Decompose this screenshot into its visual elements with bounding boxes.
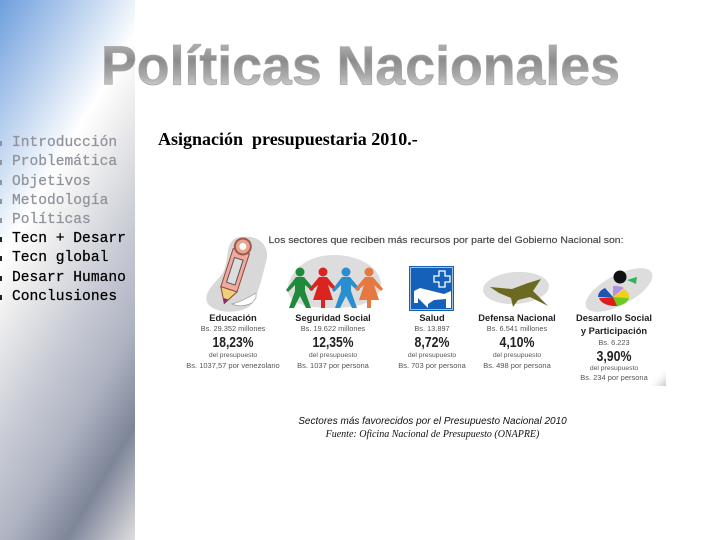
sector: Seguridad Social: Bs. 19.622 millones — [301, 324, 366, 333]
navigation menu: Políticas — [12, 212, 91, 228]
icon: four people holding hands — [286, 255, 383, 308]
icon: fighter jet — [482, 270, 550, 307]
sector: Defensa Nacional — [478, 270, 556, 370]
sector: Educación: Bs. 1037,57 por venezolano — [186, 361, 280, 370]
icon: pie chart and figure — [579, 259, 659, 321]
sector: Seguridad Social — [286, 255, 383, 370]
sector: Defensa Nacional: 4,10% — [500, 335, 535, 351]
sector: Educación: Bs. 29.352 millones — [201, 324, 266, 333]
sector: Salud — [398, 266, 467, 370]
sector: Defensa Nacional: Bs. 498 por persona — [483, 361, 552, 370]
navigation menu: Objetivos — [12, 174, 91, 190]
caption — [298, 416, 567, 440]
sector: Defensa Nacional: Defensa Nacional — [478, 313, 556, 323]
sector: Seguridad Social: Seguridad Social — [295, 313, 371, 323]
navigation menu: Tecn + Desarr — [12, 231, 126, 247]
fade at corner — [648, 368, 666, 386]
sector: Desarrollo Social y Participación: Bs. 234 por persona — [580, 373, 649, 382]
navigation menu: Introducción — [12, 135, 117, 151]
icon: pencil and hand — [206, 236, 267, 312]
sector: Salud: 8,72% — [414, 335, 450, 351]
icon: hospital bed sign — [409, 266, 454, 311]
sector: Seguridad Social: Bs. 1037 por persona — [297, 361, 370, 370]
sector: Seguridad Social: del presupuesto — [309, 352, 357, 359]
sector: Educación: del presupuesto — [209, 352, 257, 359]
sector: Desarrollo Social y Participación: Bs. 6.223 — [598, 338, 630, 347]
sector: Educación — [186, 236, 280, 370]
sector: Desarrollo Social y Participación: Desarrollo Social — [576, 313, 652, 323]
sector: Desarrollo Social y Participación: del presupuesto — [590, 365, 638, 372]
panel: sidebar gradient — [0, 0, 135, 540]
sector: Salud: Salud — [419, 313, 445, 323]
sector: Desarrollo Social y Participación: 3,90% — [596, 349, 632, 365]
caption: Fuente: Oficina Nacional de Presupuesto (ONAPRE) — [326, 429, 539, 440]
navigation menu: Conclusiones — [12, 289, 117, 305]
navigation menu: Tecn global — [12, 250, 108, 266]
navigation menu: Metodología — [12, 193, 108, 209]
sector: Desarrollo Social y Participación — [576, 259, 666, 386]
navigation menu — [0, 134, 126, 305]
heading: budget allocation: Asignación presupuestaria 2010.- — [158, 129, 418, 149]
sector: Educación: Educación — [209, 312, 257, 323]
sector: Defensa Nacional: Bs. 6.541 millones — [487, 324, 547, 333]
sector: Seguridad Social: 12,35% — [312, 335, 354, 351]
caption: Sectores más favorecidos por el Presupuesto Nacional 2010 — [298, 416, 567, 427]
infographic: sectors receiving most resources — [186, 234, 666, 386]
sector: Defensa Nacional: del presupuesto — [493, 352, 541, 359]
navigation menu: Desarr Humano — [12, 270, 126, 286]
sector: Salud: Bs. 13.897 — [414, 324, 450, 333]
sector: Desarrollo Social y Participación: y Participación — [581, 326, 647, 336]
navigation menu: Problemática — [12, 154, 117, 170]
sector: Salud: del presupuesto — [408, 352, 456, 359]
infographic heading: Los sectores que reciben más recursos por parte del Gobierno Nacional son: — [268, 234, 624, 245]
sector: Educación: 18,23% — [212, 335, 254, 351]
sector: Salud: Bs. 703 por persona — [398, 361, 467, 370]
